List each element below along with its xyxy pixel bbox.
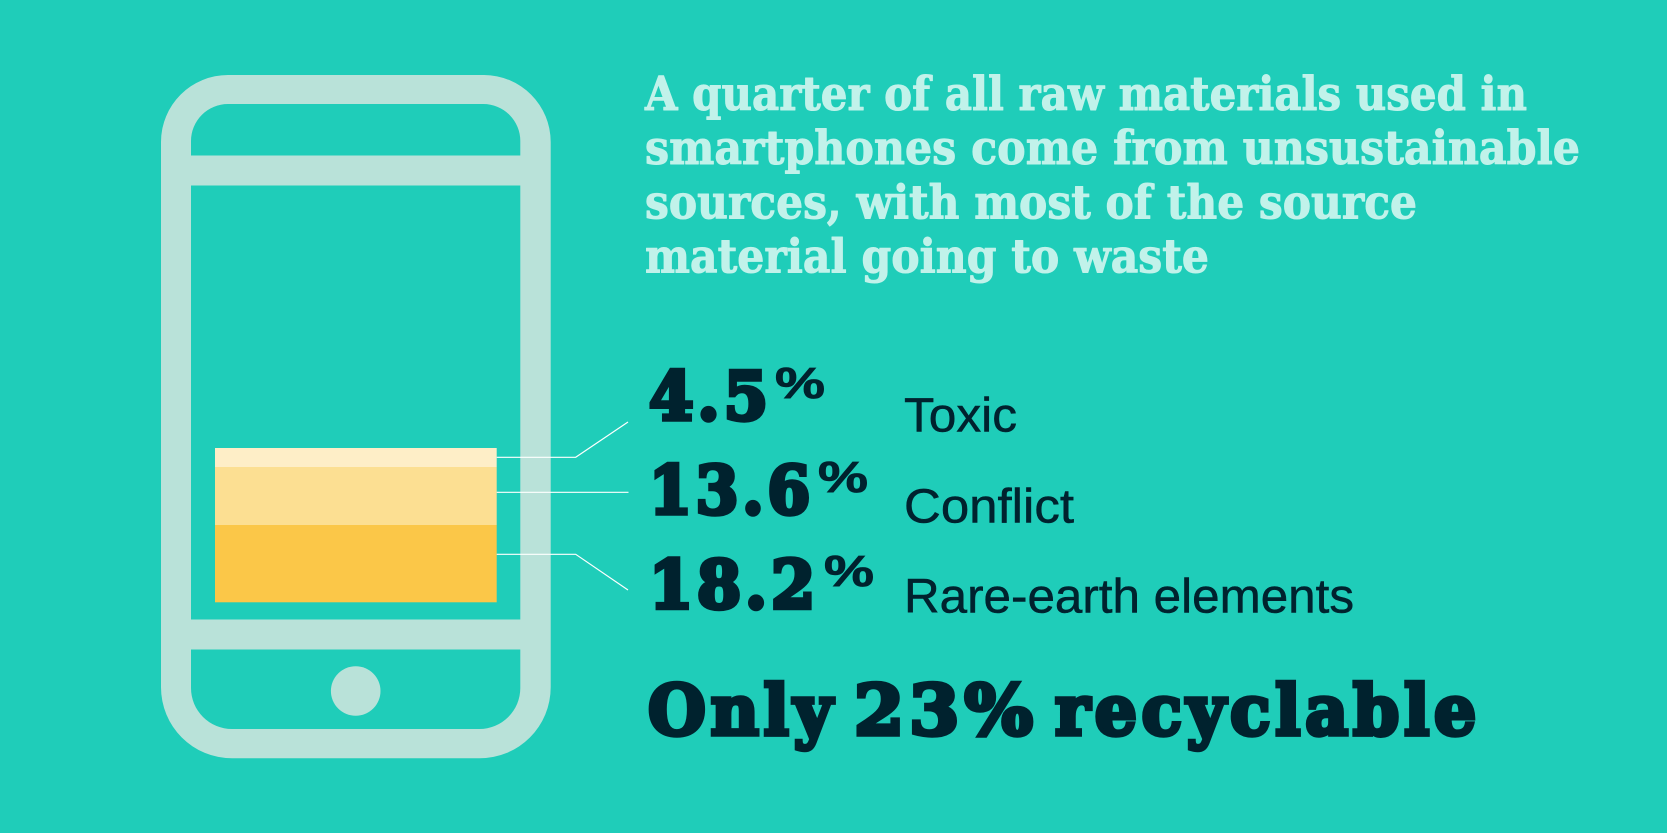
- callout: only 23% recyclable: [648, 670, 1481, 752]
- icon: smartphone: [161, 75, 551, 758]
- stat: 13.6% conflict: 13.6: [649, 452, 814, 530]
- heading: sources, with most of the source: [645, 175, 1417, 230]
- heading: [644, 67, 1580, 284]
- callout: only 23% recyclable: Only: [648, 670, 837, 752]
- stacked bar: raw material shares: [215, 448, 497, 602]
- stat: 18.2% rare-earth elements: %: [824, 547, 874, 596]
- heading: A quarter of all raw materials used in: [644, 67, 1527, 122]
- stat: 13.6% conflict: Conflict: [904, 480, 1074, 533]
- stat: 4.5% toxic: %: [775, 359, 825, 408]
- stat: 18.2% rare-earth elements: Rare-earth elements: [904, 571, 1354, 624]
- callout: only 23% recyclable: recyclable: [1055, 670, 1481, 752]
- leader lines: [497, 422, 628, 590]
- stat: 13.6% conflict: [649, 452, 1074, 533]
- stat: 13.6% conflict: %: [818, 453, 868, 502]
- heading: material going to waste: [645, 229, 1209, 284]
- stat: 4.5% toxic: Toxic: [904, 390, 1017, 443]
- stat: 18.2% rare-earth elements: 18.2: [649, 546, 819, 624]
- stat: 18.2% rare-earth elements: [649, 546, 1354, 624]
- heading: smartphones come from unsustainable: [645, 121, 1580, 176]
- stat: 4.5% toxic: 4.5: [649, 358, 772, 436]
- stat: 4.5% toxic: [649, 358, 1017, 443]
- callout: only 23% recyclable: 23%: [854, 670, 1038, 752]
